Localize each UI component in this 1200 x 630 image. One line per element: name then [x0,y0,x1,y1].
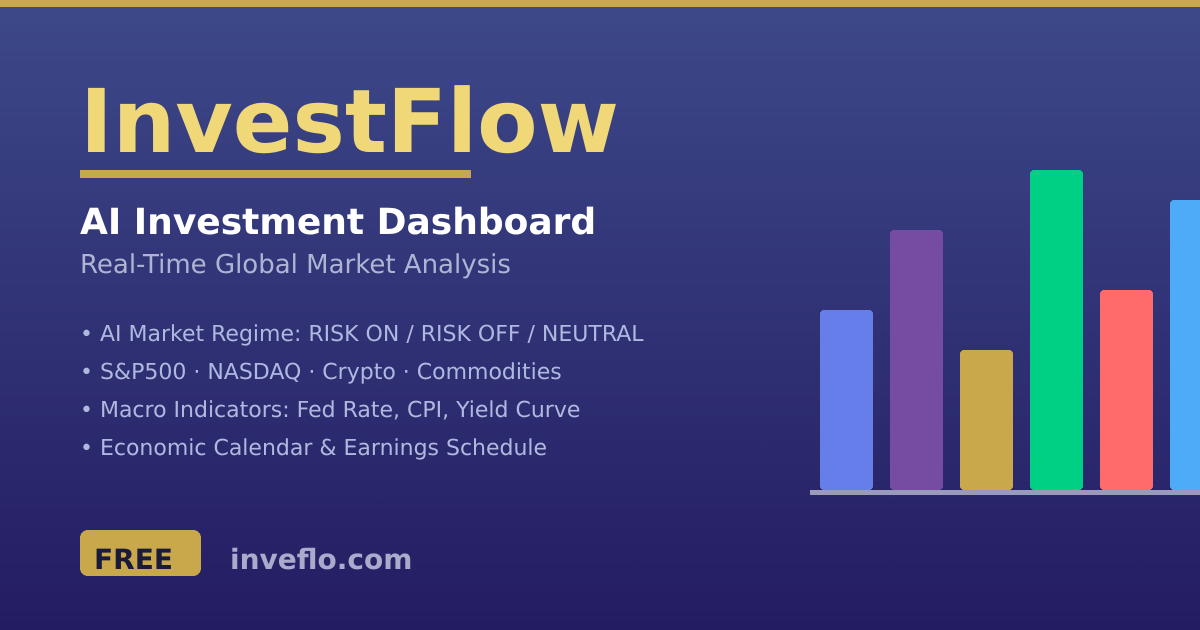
bar 1 [820,310,873,490]
feature: market regime: • AI Market Regime: RISK ON / RISK OFF / NEUTRAL [80,322,644,347]
bar 2 [890,230,943,490]
badge: free [80,530,201,576]
feature: markets: • S&P500 · NASDAQ · Crypto · Commodities [80,360,562,385]
feature list [80,322,644,461]
feature: calendar: • Economic Calendar & Earnings Schedule [80,436,547,461]
chart baseline [810,490,1200,495]
website url: inveflo.com [230,543,412,576]
subtitle: AI Investment Dashboard [80,202,596,243]
bar 4 [1030,170,1083,490]
bar chart [810,170,1200,495]
tagline: Real-Time Global Market Analysis [80,250,511,280]
badge: free: FREE [94,543,173,576]
title underline [80,170,471,178]
bar 3 [960,350,1013,490]
bar 5 [1100,290,1153,490]
top accent bar [0,0,1200,7]
bar 6 [1170,200,1200,490]
title: InvestFlow [80,70,619,173]
feature: macro: • Macro Indicators: Fed Rate, CPI, Yield Curve [80,398,580,423]
